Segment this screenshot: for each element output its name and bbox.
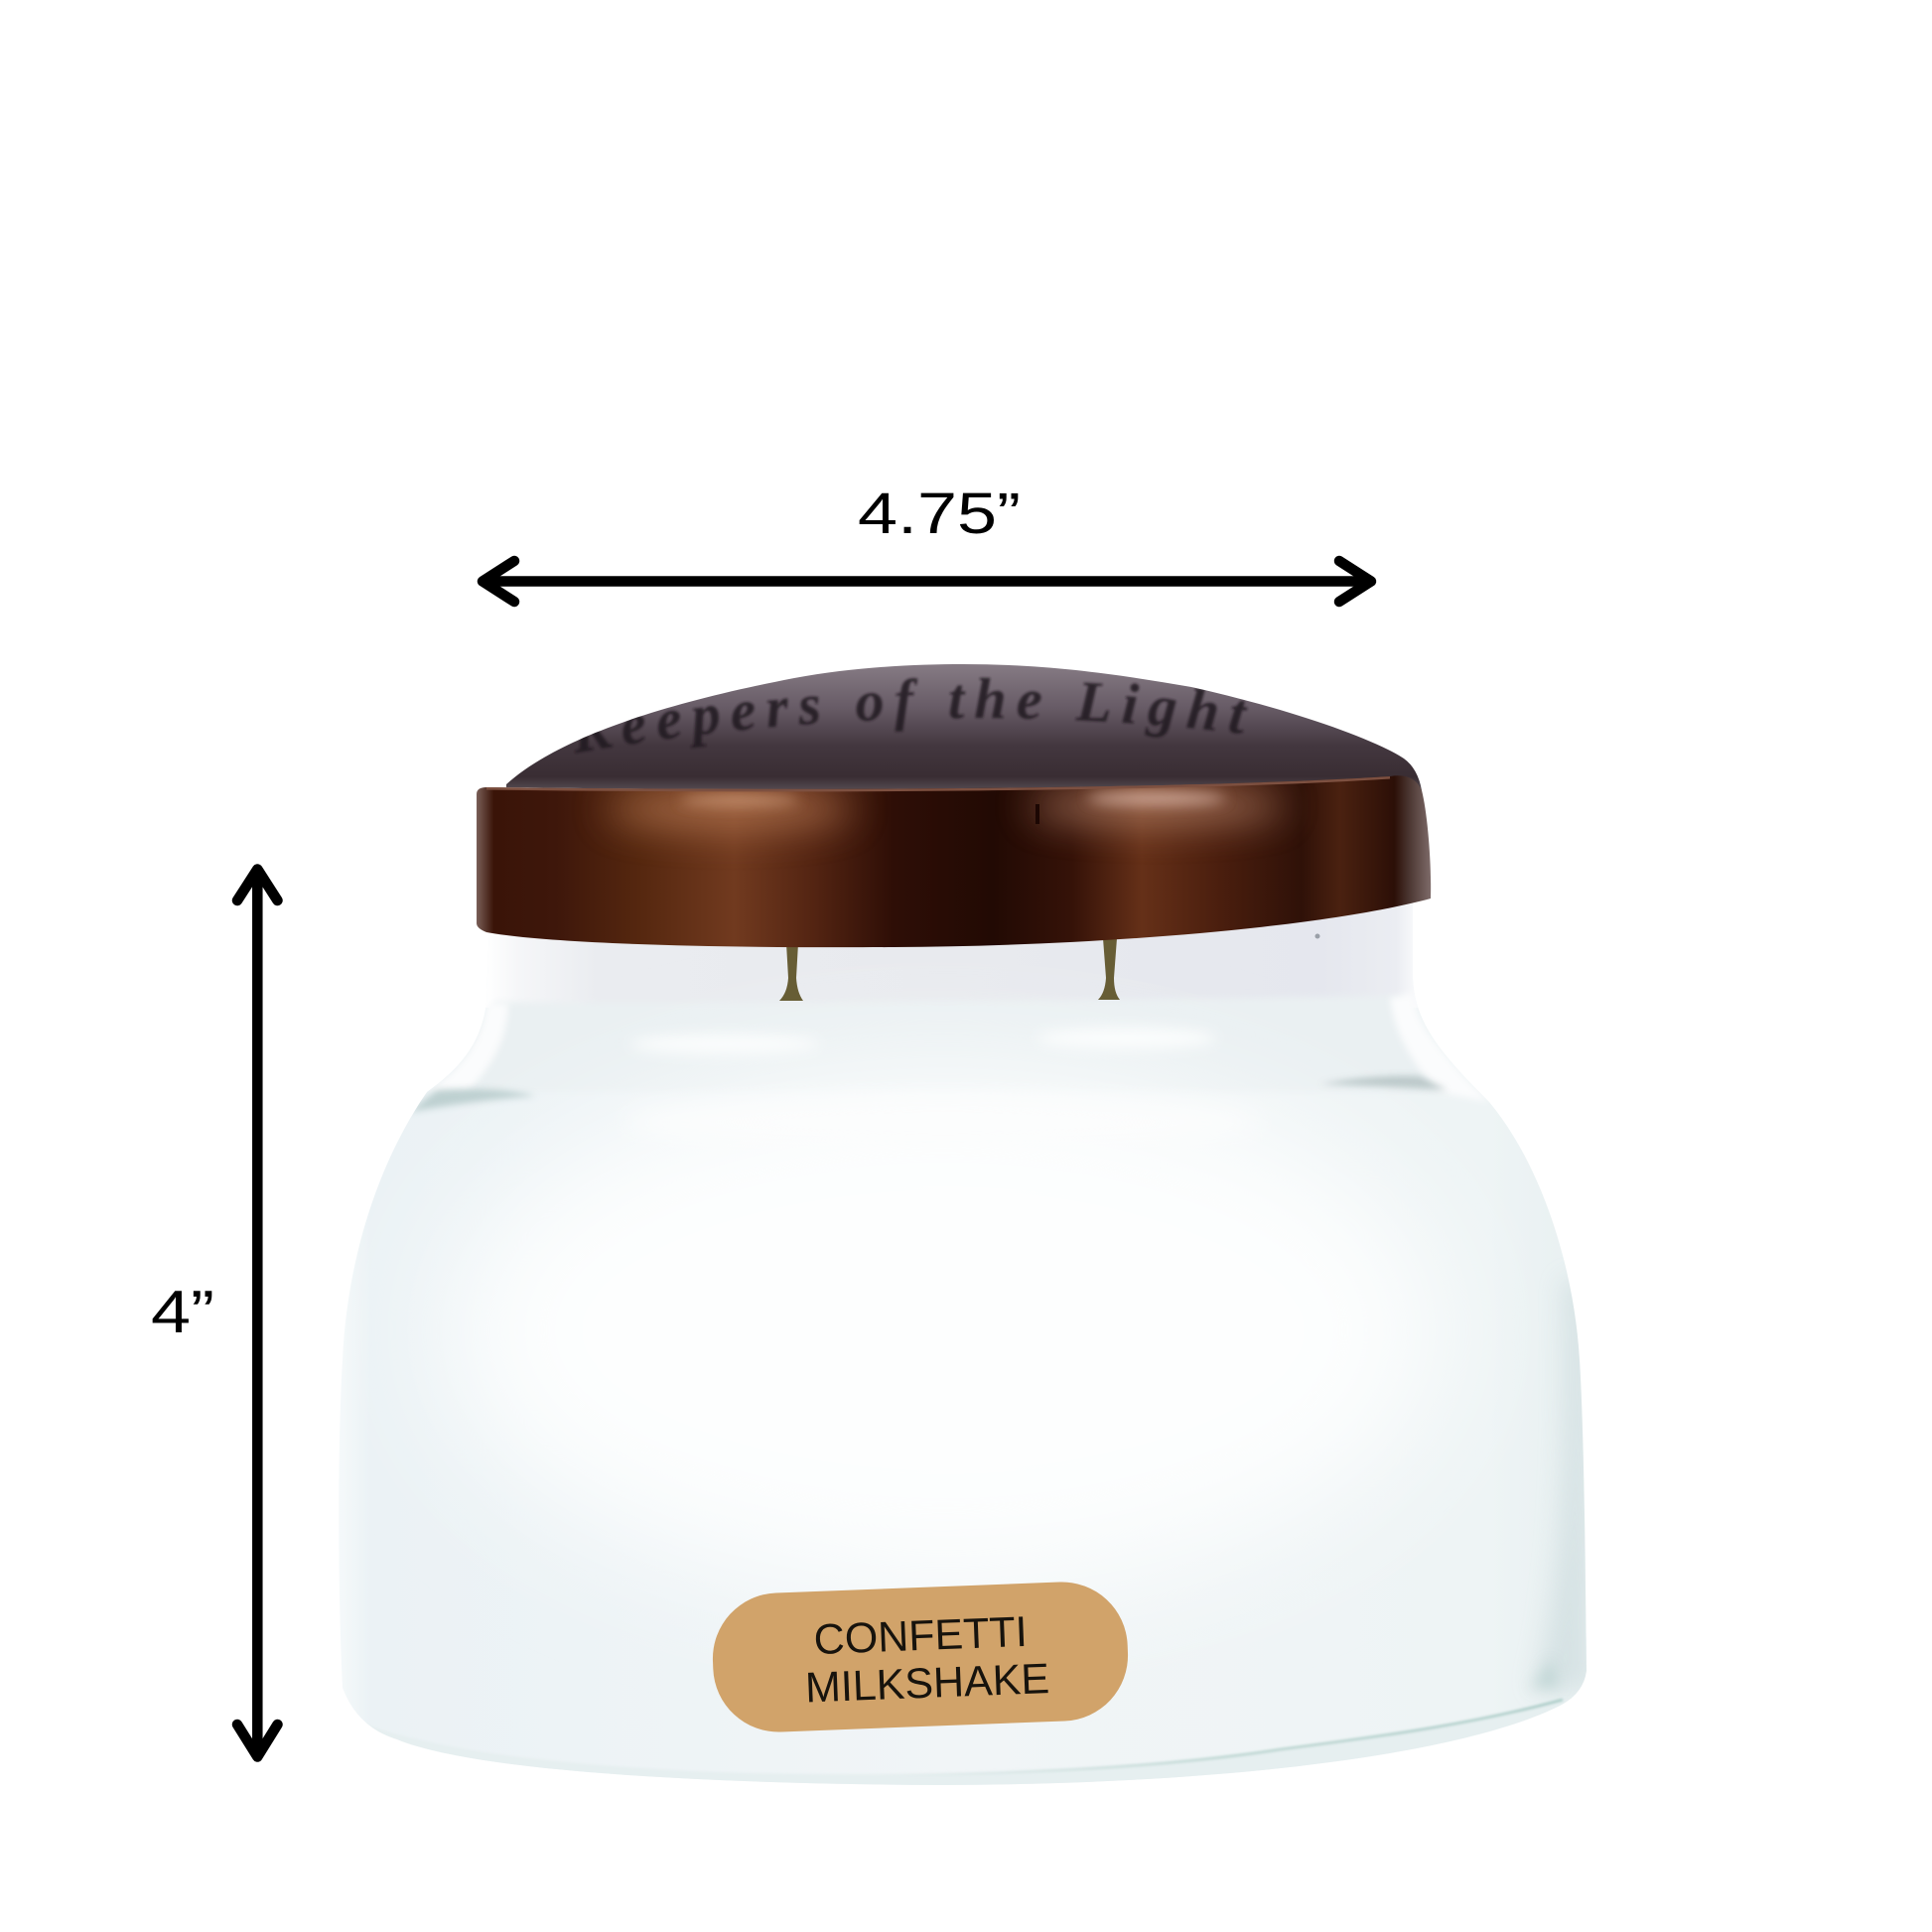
lid dome: Keepers of the Light	[574, 676, 1249, 755]
wick right	[1098, 938, 1120, 1000]
label text: MILKSHAKE	[804, 1655, 1050, 1712]
product label	[710, 1580, 1131, 1734]
copper lid	[477, 664, 1432, 947]
width label: 4.75”	[858, 482, 1021, 546]
glass speck	[1314, 933, 1320, 939]
jar glass and wax body	[328, 884, 1598, 1807]
height label: 4”	[151, 1279, 214, 1345]
arrow: width dimension	[483, 561, 1371, 602]
infographic canvas	[153, 492, 1587, 1785]
arrow: height dimension	[237, 870, 278, 1757]
lid rim band	[472, 764, 1440, 953]
lid dome	[506, 664, 1422, 790]
candle jar	[340, 664, 1587, 1785]
wick left	[779, 943, 803, 1001]
label text: CONFETTI	[813, 1608, 1029, 1664]
